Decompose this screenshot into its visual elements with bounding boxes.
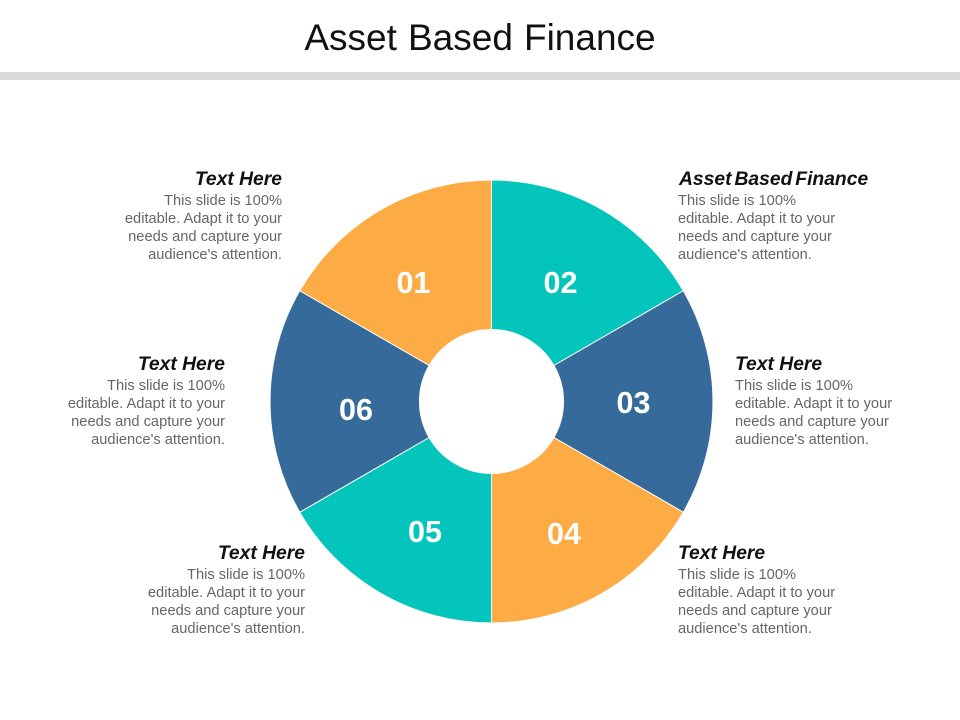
text block 06	[68, 354, 225, 448]
text block 05: This slide is 100%	[187, 567, 305, 583]
title: Asset Based Finance	[304, 17, 656, 58]
segment 02: 02	[544, 266, 577, 300]
text block 04: audience's attention.	[678, 621, 812, 637]
text block 06: needs and capture your	[71, 414, 225, 430]
text block 02: needs and capture your	[678, 229, 832, 245]
segment 04	[492, 438, 683, 623]
text block 06: audience's attention.	[91, 432, 225, 448]
text block 03: audience's attention.	[735, 432, 869, 448]
text block 04: needs and capture your	[678, 603, 832, 619]
segment 01: 01	[397, 266, 430, 300]
text block 01: needs and capture your	[128, 229, 282, 245]
segment 03	[554, 291, 713, 512]
text block 03	[735, 354, 892, 448]
text block 04: editable. Adapt it to your	[678, 585, 835, 601]
text block 04	[678, 543, 835, 637]
text block 02: audience's attention.	[678, 247, 812, 263]
segment 04: 04	[547, 517, 581, 551]
segment 06	[270, 291, 429, 512]
text block 02: editable. Adapt it to your	[678, 211, 835, 227]
text block 06: Text Here	[138, 354, 225, 375]
text block 01: Text Here	[195, 169, 282, 190]
segment 05: 05	[408, 515, 442, 549]
text block 05: Text Here	[218, 543, 305, 564]
text block 05: needs and capture your	[151, 603, 305, 619]
text block 02	[678, 169, 868, 263]
text block 01: editable. Adapt it to your	[125, 211, 282, 227]
segment 05	[300, 438, 492, 623]
segment 03: 03	[617, 386, 650, 420]
text block 06: editable. Adapt it to your	[68, 396, 225, 412]
text block 03: Text Here	[735, 354, 822, 375]
segment 06: 06	[339, 393, 373, 427]
text block 04: Text Here	[678, 543, 765, 564]
text block 01: This slide is 100%	[164, 193, 282, 209]
text block 02: Asset Based Finance	[679, 169, 868, 190]
text block 05: audience's attention.	[171, 621, 305, 637]
segment 01	[300, 180, 492, 366]
text block 05: editable. Adapt it to your	[148, 585, 305, 601]
text block 01: audience's attention.	[148, 247, 282, 263]
text block 06: This slide is 100%	[107, 378, 225, 394]
text block 04: This slide is 100%	[678, 567, 796, 583]
segment 02	[492, 180, 683, 366]
text block 01	[125, 169, 282, 263]
title underline bar	[0, 72, 960, 80]
text block 02: This slide is 100%	[678, 193, 796, 209]
text block 03: This slide is 100%	[735, 378, 853, 394]
text block 03: editable. Adapt it to your	[735, 396, 892, 412]
text block 03: needs and capture your	[735, 414, 889, 430]
text block 05	[148, 543, 305, 637]
